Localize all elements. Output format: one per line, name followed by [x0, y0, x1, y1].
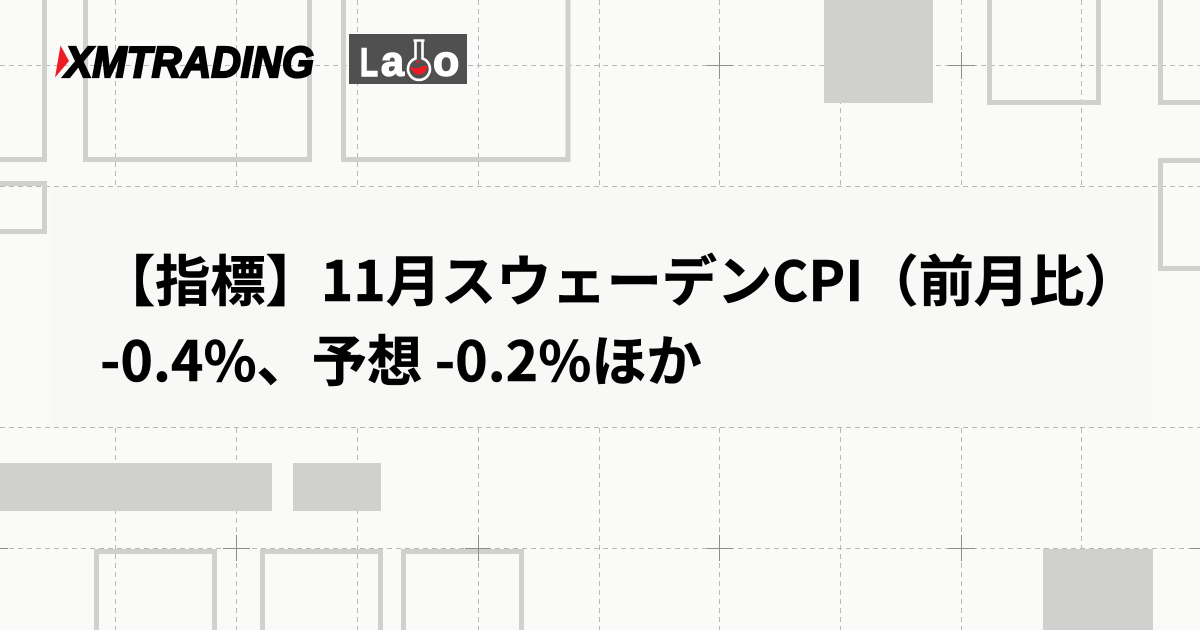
center panel [50, 187, 1152, 427]
letters: L [360, 41, 378, 84]
icon: flask [408, 40, 430, 80]
title line 1: 【指標】11月スウェーデンCPI（前月比） [100, 237, 1139, 317]
logo: Lab [349, 34, 467, 84]
letters: a [381, 38, 405, 84]
title [100, 237, 1139, 397]
title: -0.4%、予想 -0.2%ほか [100, 317, 702, 397]
letters [360, 38, 459, 86]
logo: XMTRADING [55, 38, 314, 86]
logo plate [349, 34, 467, 84]
icon: red triangle [55, 46, 69, 78]
